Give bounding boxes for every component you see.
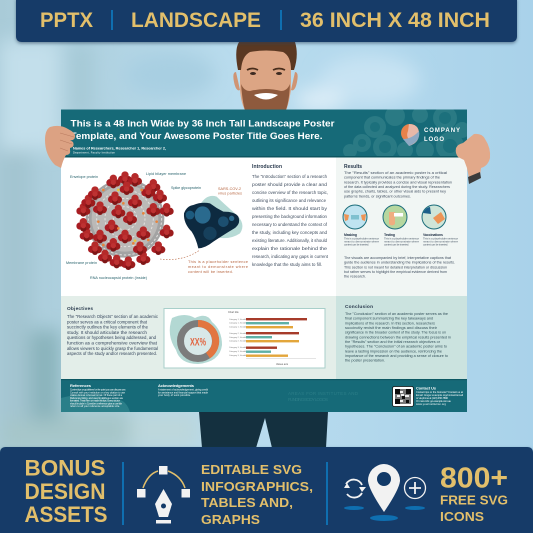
objectives panel: poster serves as a critical component that	[67, 319, 148, 324]
introduction: existing literature. Additionally, it should	[252, 238, 328, 243]
virus labels: Spike glycoprotein	[171, 186, 201, 190]
conclusion panel: leave a lasting impression on the audience, reinforcing the	[345, 349, 442, 353]
left hand	[45, 126, 75, 168]
introduction	[252, 164, 329, 267]
contact us: Contact tips or the footnote? Contact us at	[416, 390, 463, 394]
800+ free svg icons: ICONS	[440, 509, 484, 524]
introduction: the study, including key concepts and	[252, 230, 328, 235]
right hand	[456, 134, 490, 184]
references: References	[70, 383, 92, 388]
contact us: Or more info: go.example.com.au	[416, 399, 452, 403]
bar chart: Category 2, Variable 1	[229, 332, 250, 335]
results: This section is not meant for detailed interpretation or discussion	[344, 265, 447, 269]
introduction: research, indicating any gaps in current	[252, 254, 329, 259]
introduction: The "Introduction" section of a research	[252, 174, 328, 179]
results: guide the audience in understanding the implications of the results.	[344, 261, 455, 265]
conclusion panel: the poster presentation.	[345, 359, 385, 363]
icon captions: This is a placeholder sentence	[344, 236, 380, 240]
virus labels: virus particles	[218, 192, 242, 196]
bottom banner	[0, 447, 533, 533]
icon captions: This is a placeholder sentence	[384, 236, 420, 240]
objectives panel: succinctly outlines the key elements of the	[67, 325, 149, 330]
introduction: within the field. It should start by	[252, 206, 328, 211]
800+ free svg icons: 800+	[440, 462, 508, 494]
conclusion panel: significance in the broader context of the study. The focus is on	[345, 331, 446, 335]
virus labels: Envelope protein	[70, 175, 98, 179]
results: the research.	[344, 275, 366, 279]
acknowledgements: Acknowledgements	[158, 383, 195, 388]
footer	[61, 379, 467, 412]
conclusion panel: The "Conclusion" section of an academic poster serves as the	[345, 312, 448, 316]
poster body	[61, 157, 336, 297]
poster title: Template, and Your Awesome Poster Title Goes Here.	[70, 131, 322, 142]
bar chart: Category 1, Variable 3	[229, 326, 250, 328]
results: research. It typically provides a concise and visual representation	[344, 180, 452, 184]
conclusion panel	[336, 296, 467, 379]
donut chart: XX%	[190, 336, 206, 348]
chart card	[164, 308, 325, 368]
results background	[336, 157, 467, 297]
bar chart: Category 2, Variable 2	[229, 336, 250, 339]
800+ free svg icons	[440, 462, 508, 524]
icon: pen tool	[137, 466, 190, 524]
results: component that communicates the primary findings of the	[344, 176, 440, 180]
results: patterns trends, or significant outcomes.	[344, 194, 411, 198]
bar chart: Chart title	[228, 311, 239, 314]
dashed callout: content will be inserted.	[188, 270, 233, 274]
contact us: Contact Us	[416, 386, 436, 390]
top banner	[16, 0, 517, 42]
bar chart: Category 3, Variable 3	[229, 354, 250, 357]
icon: vaccinations	[422, 205, 446, 229]
dashed callout	[160, 250, 248, 274]
icon captions: meant to demonstrate where	[344, 240, 380, 244]
introduction: concise overview of the research topic,	[252, 190, 328, 195]
icon captions: content can be inserted.	[344, 242, 369, 246]
virus labels: SARS-COV-2	[218, 187, 241, 191]
person head	[233, 42, 298, 112]
editable svg text	[201, 462, 313, 527]
editable svg text: EDITABLE SVG	[201, 462, 302, 477]
institute logos placeholder: AREAS FOR INSTITUTES AND	[288, 391, 359, 396]
acknowledgements: your body of work possible.	[158, 394, 191, 397]
company logo: COMPANY	[424, 128, 460, 134]
icon captions: This is a placeholder sentence	[423, 236, 458, 240]
bar chart: Category 3, Variable 2	[229, 350, 250, 353]
icon captions: Masking	[344, 233, 357, 237]
introduction: explain the rationale behind the	[252, 246, 328, 251]
results: Results	[344, 164, 362, 170]
conclusion panel: implications of the research. In this section, researchers	[345, 321, 435, 325]
donut chart	[170, 315, 222, 364]
bonus design assets: DESIGN	[24, 479, 106, 504]
bar chart: Category 1, Variable 1	[229, 318, 250, 321]
virus labels: Lipid bilayer membrane	[146, 172, 186, 176]
icon: location pin	[368, 464, 400, 521]
top banner: 36 INCH X 48 INCH	[300, 9, 490, 32]
introduction: Introduction	[252, 164, 282, 170]
icon: masking	[343, 205, 367, 229]
bar chart: Category 3, Variable 1	[229, 346, 250, 349]
icon captions	[344, 233, 458, 246]
poster title: This is a 48 Inch Wide by 36 Inch Tall Landscape Poster	[70, 118, 335, 130]
icon captions: Testing	[384, 233, 395, 237]
objectives panel: The "Research Objects" section of an academic	[67, 314, 158, 319]
company logo	[401, 124, 460, 146]
editable svg text: INFOGRAPHICS,	[201, 479, 313, 494]
institute logos placeholder	[288, 391, 359, 402]
contact us: Email: longer.example.org/contact/email	[416, 393, 463, 397]
poster title	[70, 118, 335, 142]
dashed callout: This is a placeholder sentence	[188, 260, 248, 264]
conclusion panel: drawing connections between the empirical results presented in	[345, 335, 451, 339]
objectives panel: questions or hypotheses being addressed, and	[67, 335, 157, 340]
QR code	[392, 386, 414, 406]
conclusion panel: hypotheses. The "Conclusion" of an academic poster aims to	[345, 345, 447, 349]
references: Consult with your institution or a key citation to use	[70, 391, 126, 394]
icon captions: meant to demonstrate where	[423, 240, 458, 244]
icon: testing	[383, 205, 407, 229]
top banner: LANDSCAPE	[131, 9, 261, 32]
results: The visuals are accompanied by brief, interpretative captions that	[344, 256, 451, 260]
trousers	[199, 412, 328, 448]
editable svg text: TABLES AND,	[201, 495, 293, 510]
introduction: presenting the background information	[252, 214, 328, 219]
references: formatted. Treat them or made this tips. Every source	[70, 400, 121, 402]
institute logos placeholder: FUNDING BODY LOGOS	[288, 397, 328, 402]
bar chart	[228, 311, 316, 366]
introduction: outlining its significance and relevance	[252, 198, 327, 203]
virus labels: Membrane protein	[66, 261, 97, 265]
conclusion panel: importance of the research and providing a sense of closure to	[345, 354, 448, 358]
references: Reference listing, and used in attributes section are	[70, 397, 124, 400]
bar chart: Category 2, Variable 3	[229, 340, 250, 342]
poster header	[61, 110, 467, 158]
icon captions: content can be inserted.	[423, 242, 448, 246]
icon captions: content can be inserted.	[384, 242, 409, 246]
objectives panel: allows viewers to quickly grasp the fundamental	[67, 346, 158, 351]
bonus design assets	[24, 456, 108, 527]
authors	[73, 146, 166, 154]
icon: refresh	[344, 480, 366, 510]
results: but rather serves to highlight the empirical evidence derived from	[344, 270, 447, 274]
dashed callout: meant to demonstrate where	[188, 265, 248, 269]
bar chart: Category 1, Variable 2	[229, 322, 250, 324]
references	[70, 383, 126, 408]
acknowledgements: for assistance and financial support that made	[158, 391, 209, 394]
objectives panel	[61, 296, 336, 379]
authors: Department, Faculty Institution	[73, 150, 116, 154]
company logo: LOGO	[424, 137, 444, 143]
objectives panel: aspects of the study and/or research presented.	[67, 351, 157, 356]
icon captions: meant to demonstrate where	[384, 240, 420, 244]
results: The "Results" section of an academic poster is a critical	[344, 171, 447, 175]
results	[343, 164, 458, 279]
top banner: PPTX	[40, 9, 93, 32]
results: use graphs, charts, tables, or other visual aids to present key	[344, 190, 446, 194]
contact us: www.yourinstitution.org	[416, 402, 447, 406]
icon: plus	[404, 478, 426, 510]
conclusion panel: Conclusion	[345, 304, 373, 310]
poster	[61, 106, 470, 412]
800+ free svg icons: FREE SVG	[440, 492, 508, 508]
introduction: necessary to understand the context of	[252, 222, 328, 227]
contact us	[416, 386, 463, 406]
introduction: knowledge that the study aims to fill.	[252, 262, 322, 267]
bonus design assets: ASSETS	[24, 502, 108, 527]
conclusion panel: succinctly revisit the main findings and discuss their	[345, 326, 438, 330]
virus labels	[66, 172, 242, 280]
references: refers to all your reference acceptable size.	[70, 405, 120, 408]
introduction: poster should provide a clear and	[252, 182, 328, 187]
objectives panel: Objectives	[67, 306, 93, 312]
objectives panel: study. It should articulate the research	[67, 330, 148, 335]
bar chart: Values axis	[276, 363, 289, 366]
virus labels: RNA nucleocapsid protein (inside)	[90, 276, 147, 280]
acknowledgements: A statement of acknowledgement, giving credit	[158, 388, 208, 392]
editable svg text: GRAPHS	[201, 512, 260, 527]
acknowledgements	[158, 383, 209, 397]
conclusion panel: final component summarizing the key takeaways and	[345, 317, 433, 321]
results: of the data collected and analyzed during the study. Researchers	[344, 185, 450, 189]
conclusion panel: the "Results" section and the initial research objectives or	[345, 340, 441, 344]
bonus design assets: BONUS	[24, 456, 106, 480]
objectives panel: function as a comprehensive overview that	[67, 340, 158, 346]
icon captions: Vaccinations	[423, 233, 443, 237]
references: citation format: A formal format. Of these part of a	[70, 394, 123, 397]
virus illustration	[76, 171, 174, 270]
references: should include in Consider a reference give a use title	[70, 402, 123, 405]
authors: Names of Researchers, Researcher 1, Researcher 2,	[73, 146, 166, 150]
references: Content tips or guidelines for the point you can discuss use.	[70, 388, 126, 392]
contact us: or via phone at (123) 456-7890	[416, 396, 449, 400]
virus particle cluster	[184, 196, 242, 248]
